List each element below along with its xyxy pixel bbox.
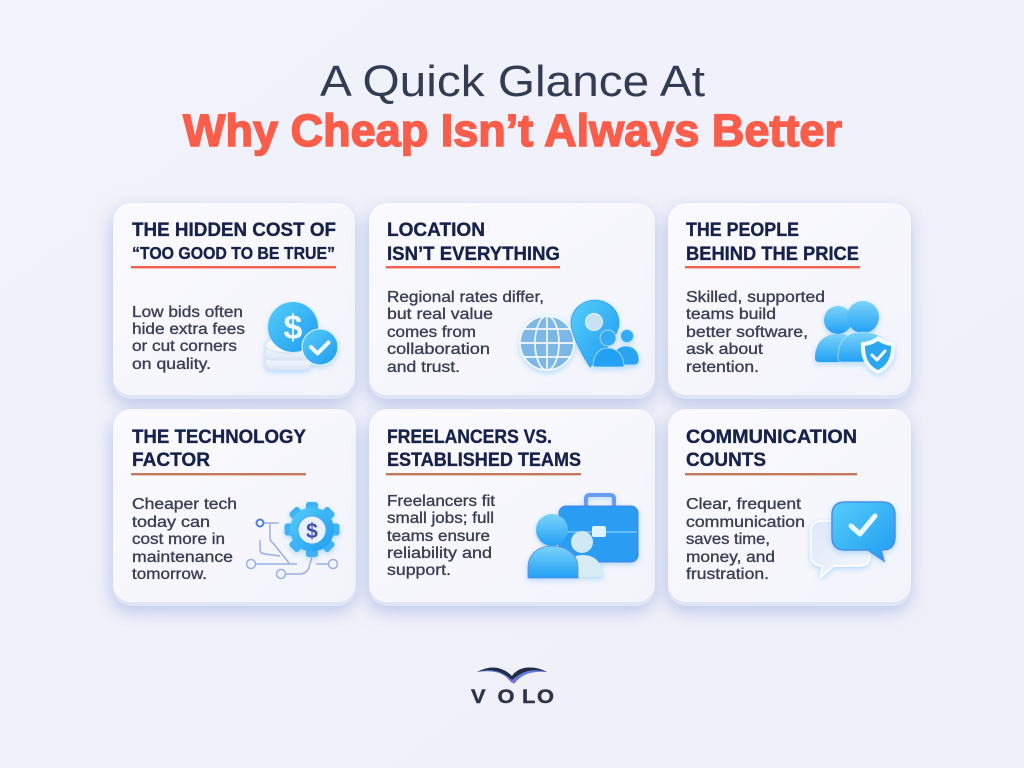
body: hidden cost: Low bids often [132,304,243,321]
panel: freelancers [369,409,655,606]
body: location: comes from [387,324,476,341]
body: freelancers: small jobs; full [387,510,494,527]
body: people [686,289,825,376]
body: freelancers: support. [387,562,451,579]
icon: gear with circuit [246,502,340,578]
panel: hidden cost [113,203,355,399]
heading: location: ISN’T EVERYTHING [387,243,560,265]
title line 2: Why Cheap Isn’t Always Better [183,105,842,156]
body: hidden cost: or cut corners [132,338,237,355]
body: freelancers [387,493,496,579]
body: people: teams build [686,306,776,323]
heading: freelancers [386,426,581,475]
heading: freelancers: FREELANCERS VS. [387,426,552,448]
body: communication: saves time, [686,531,770,548]
body: location: collaboration [387,341,490,358]
body: hidden cost: on quality. [132,356,211,373]
panel: location [369,203,655,399]
icon: coins with check [265,302,338,370]
body: freelancers: teams ensure [387,528,490,545]
icon: briefcase and team [528,495,638,578]
heading: hidden cost [131,219,336,268]
body: technology: tomorrow. [132,566,207,583]
body: people: Skilled, supported [686,289,825,306]
logo wing [477,668,547,684]
icon: team with shield [815,301,895,374]
heading: location: LOCATION [387,219,485,241]
heading: freelancers: ESTABLISHED TEAMS [387,449,581,471]
body: technology: maintenance [132,549,233,566]
body: communication: frustration. [686,566,769,583]
heading: communication: COUNTS [686,449,766,471]
body: hidden cost: hide extra fees [132,321,245,338]
icon: coins with check: $ [284,309,303,347]
panel: technology [113,409,356,606]
body: technology: cost more in [132,531,225,548]
body: technology: Cheaper tech [132,496,237,513]
body: technology [132,496,237,583]
heading: hidden cost: “TOO GOOD TO BE TRUE” [132,243,335,263]
body: people: retention. [686,359,759,376]
heading: communication: COMMUNICATION [686,426,857,448]
heading: people: THE PEOPLE [686,219,799,241]
logo [471,668,554,708]
body: technology: today can [132,514,210,531]
body: communication [686,496,805,583]
body: freelancers: reliability and [387,545,492,562]
title [183,57,842,156]
body: communication: money, and [686,549,775,566]
icon: globe, pin and people [520,300,639,370]
body: hidden cost [132,304,245,373]
heading: people [685,219,860,268]
body: communication: communication [686,514,805,531]
heading: hidden cost: THE HIDDEN COST OF [132,219,336,241]
body: location [387,289,544,376]
icon: gear with circuit: $ [306,520,318,543]
body: location: but real value [387,306,493,323]
title line 1: A Quick Glance At [320,57,705,106]
heading: communication [685,426,857,475]
heading: technology: THE TECHNOLOGY [132,426,306,448]
panel: communication [668,409,911,606]
panel: people [668,203,911,399]
body: location: Regional rates differ, [387,289,544,306]
body: people: ask about [686,341,764,358]
icon: chat bubbles with check [811,502,895,577]
body: location: and trust. [387,359,460,376]
logo wordmark: VOLO [471,686,554,708]
body: freelancers: Freelancers fit [387,493,496,510]
body: communication: Clear, frequent [686,496,802,513]
heading: technology [131,426,306,475]
heading: people: BEHIND THE PRICE [686,243,859,265]
heading: technology: FACTOR [132,449,210,471]
heading: location [386,219,560,268]
body: people: better software, [686,324,808,341]
